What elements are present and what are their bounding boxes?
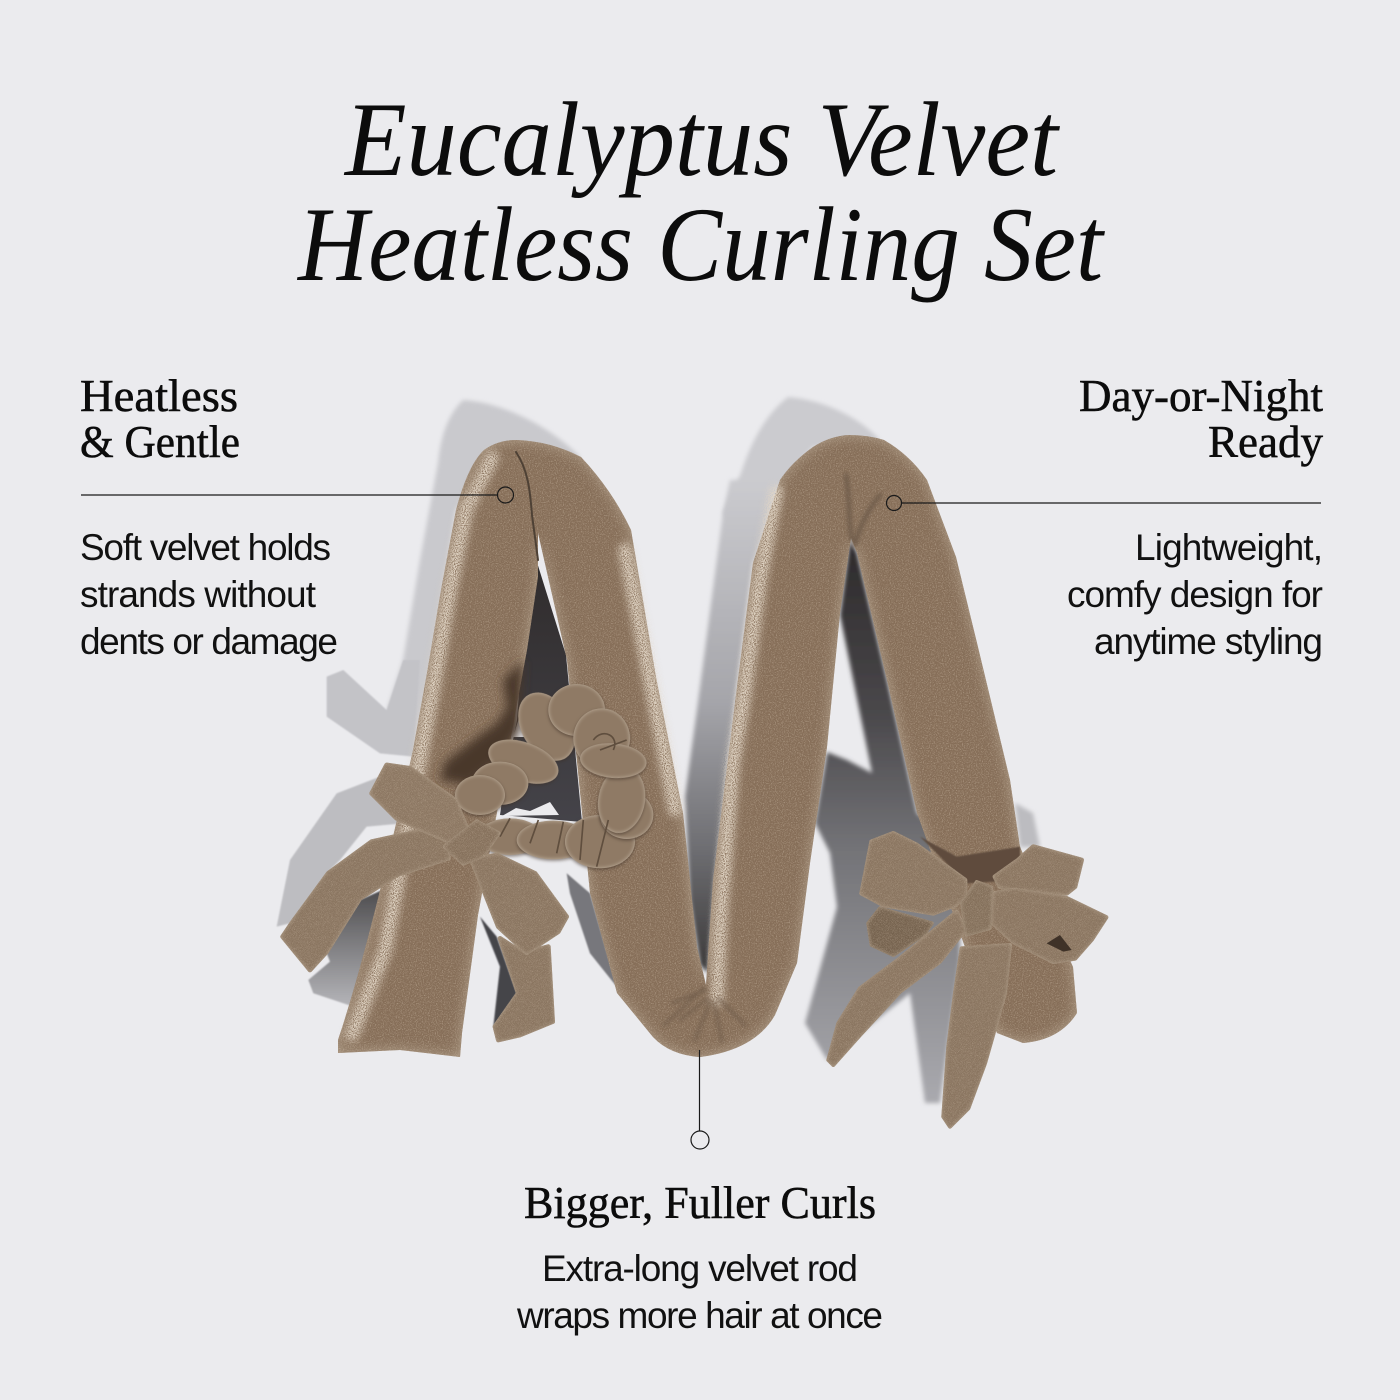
heading: Bigger, Fuller Curls	[524, 1177, 876, 1228]
bow: left	[283, 765, 567, 1040]
body text	[516, 1248, 883, 1336]
title: Heatless Curling Set	[296, 186, 1105, 303]
heading	[1079, 370, 1323, 467]
scrunchie and bow: right	[828, 833, 1106, 1127]
velvet sheen bands	[352, 458, 776, 1035]
callout: heatless and gentle	[80, 370, 514, 662]
body text: Extra-long velvet rod	[542, 1248, 858, 1289]
body text: Soft velvet holds	[80, 527, 331, 568]
heading	[80, 370, 240, 467]
cast shadows	[277, 397, 1040, 1103]
body text: dents or damage	[80, 621, 338, 662]
heading: Ready	[1208, 416, 1323, 467]
velvet rod	[338, 435, 1077, 1057]
title	[296, 81, 1105, 303]
body text	[1067, 527, 1323, 662]
callout: bigger, fuller curls	[516, 1050, 883, 1336]
body text: Lightweight,	[1135, 527, 1323, 568]
heading: Heatless	[80, 370, 238, 421]
body text	[80, 527, 338, 662]
heading: Day-or-Night	[1079, 370, 1323, 421]
leader line with marker	[886, 496, 1321, 510]
body text: anytime styling	[1094, 621, 1323, 662]
body text: wraps more hair at once	[516, 1295, 883, 1336]
heading: & Gentle	[80, 416, 240, 467]
scrunchie: left	[455, 682, 653, 868]
dark gap between the left rod legs	[500, 540, 582, 822]
callout: day-or-night ready	[886, 370, 1323, 662]
title: Eucalyptus Velvet	[343, 81, 1060, 198]
body text: strands without	[80, 574, 317, 615]
leader line with marker	[81, 487, 514, 503]
body text: comfy design for	[1067, 574, 1323, 615]
product photo: velvet curling rod with scrunchies	[277, 397, 1106, 1127]
rod details: seam, fold, shading and gathers	[440, 452, 880, 1042]
leader line with marker	[691, 1050, 709, 1149]
